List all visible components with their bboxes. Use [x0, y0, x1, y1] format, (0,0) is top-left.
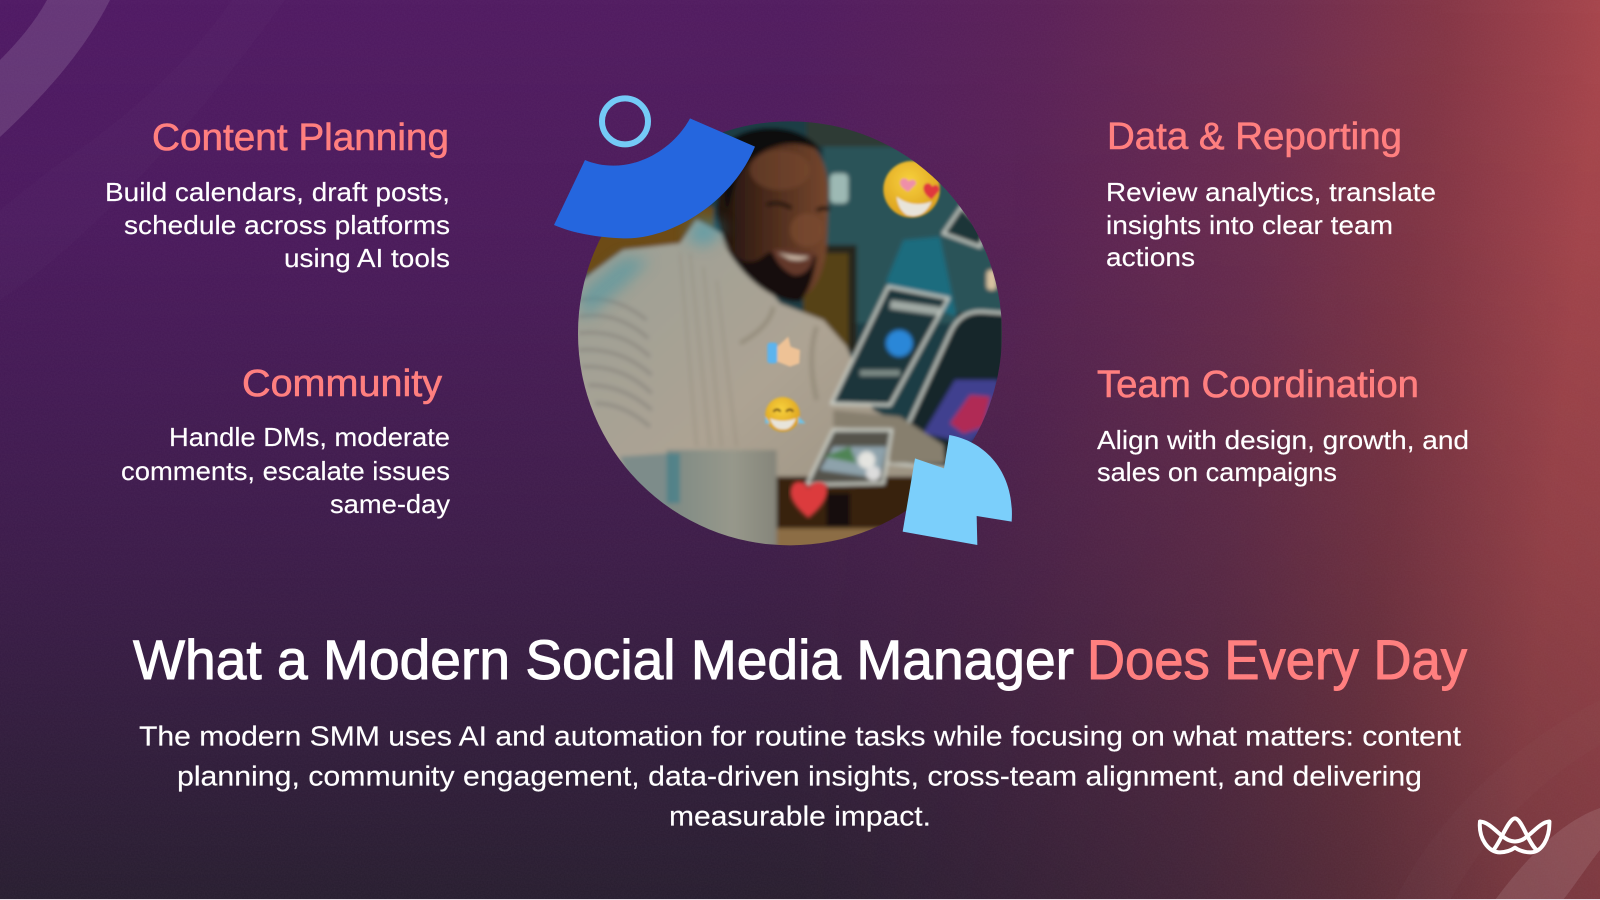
text: content planning description	[105, 177, 450, 273]
text: summary paragraph	[139, 720, 1461, 832]
face	[717, 130, 828, 300]
panel: central image group	[554, 98, 1012, 553]
title: Does Every Day	[1087, 628, 1467, 691]
soft teal highlights	[580, 217, 727, 320]
text: data and reporting description	[1106, 177, 1436, 272]
floating screens	[832, 207, 1007, 468]
heading: content planning: Content Planning	[152, 117, 449, 159]
text: data and reporting description: actions	[1106, 242, 1195, 272]
shape: light blue ring	[602, 98, 648, 144]
panel: community	[121, 363, 450, 519]
text: summary paragraph: planning, community engagement, data-driven insights, cross-team alignment, and delivering	[177, 760, 1422, 792]
heart	[790, 481, 828, 518]
text: community description	[121, 422, 450, 519]
text: content planning description: using AI tools	[284, 243, 450, 273]
text: data and reporting description: Review analytics, translate	[1106, 177, 1436, 207]
text: team coordination description	[1097, 425, 1469, 487]
heading: community: Community	[242, 363, 442, 405]
icon: logo	[1480, 818, 1549, 852]
text: data and reporting description: insights into clear team	[1106, 210, 1393, 240]
text: content planning description: Build calendars, draft posts,	[105, 177, 450, 207]
bottom edge	[0, 899, 1600, 900]
panel: content planning	[105, 117, 450, 273]
text: team coordination description: sales on campaigns	[1097, 457, 1337, 487]
text: team coordination description: Align with design, growth, and	[1097, 425, 1469, 455]
table and mug	[774, 474, 912, 530]
emoji: heart eyes	[883, 161, 940, 218]
text: community description: same-day	[330, 489, 450, 519]
photo: man with floating social screens	[573, 117, 1007, 553]
emoji: thumbs up	[767, 337, 800, 367]
text: summary paragraph: The modern SMM uses AI and automation for routine tasks while focusing on what matters: content	[139, 720, 1461, 752]
heading: data and reporting: Data & Reporting	[1107, 116, 1402, 158]
forearm	[833, 410, 945, 463]
text: content planning description: schedule across platforms	[124, 210, 450, 240]
text: community description: Handle DMs, moderate	[169, 422, 450, 452]
sweater	[578, 217, 944, 482]
text: summary paragraph: measurable impact.	[669, 800, 931, 832]
emoji: laughing	[765, 397, 806, 432]
shape: blue arc	[554, 118, 755, 238]
title: What a Modern Social Media Manager	[133, 628, 1074, 691]
heading: team coordination: Team Coordination	[1097, 364, 1419, 406]
text: community description: comments, escalate issues	[121, 456, 450, 486]
panel: team coordination	[1097, 364, 1469, 487]
shape: light blue quarter	[903, 435, 1012, 545]
panel: data and reporting	[1106, 116, 1436, 272]
